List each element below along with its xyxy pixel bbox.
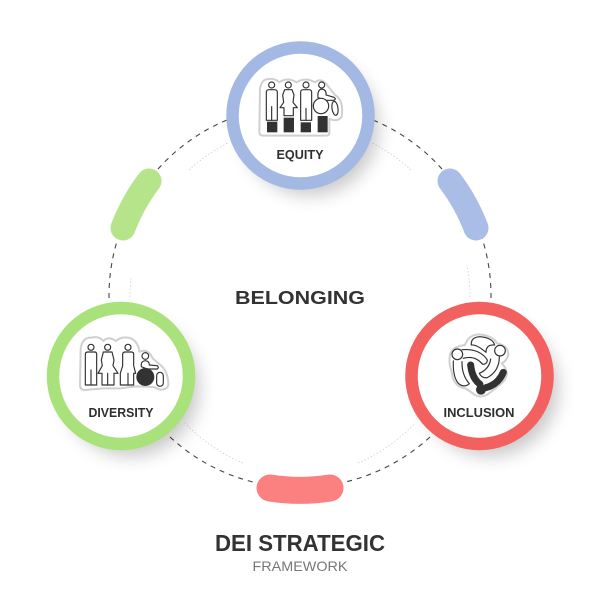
icon: inclusion swirl bbox=[449, 334, 508, 397]
dashed outer ring bbox=[109, 118, 491, 483]
center heading: BELONGING bbox=[235, 287, 365, 308]
icon: equity figures bbox=[259, 79, 342, 136]
red arc connector bbox=[270, 488, 330, 490]
label: inclusion: INCLUSION bbox=[444, 405, 514, 420]
label: equity: EQUITY bbox=[276, 148, 324, 162]
subtitle: FRAMEWORK bbox=[252, 558, 348, 574]
icon: diversity figures bbox=[80, 337, 168, 390]
green arc connector bbox=[123, 181, 149, 228]
title: DEI STRATEGIC bbox=[215, 530, 385, 556]
panel: inclusion bbox=[412, 308, 558, 456]
dotted inner ring bbox=[130, 143, 470, 463]
panel: equity bbox=[232, 48, 378, 195]
label: diversity: DIVERSITY bbox=[88, 406, 154, 420]
blue arc connector bbox=[450, 181, 476, 228]
panel: diversity bbox=[53, 308, 199, 456]
